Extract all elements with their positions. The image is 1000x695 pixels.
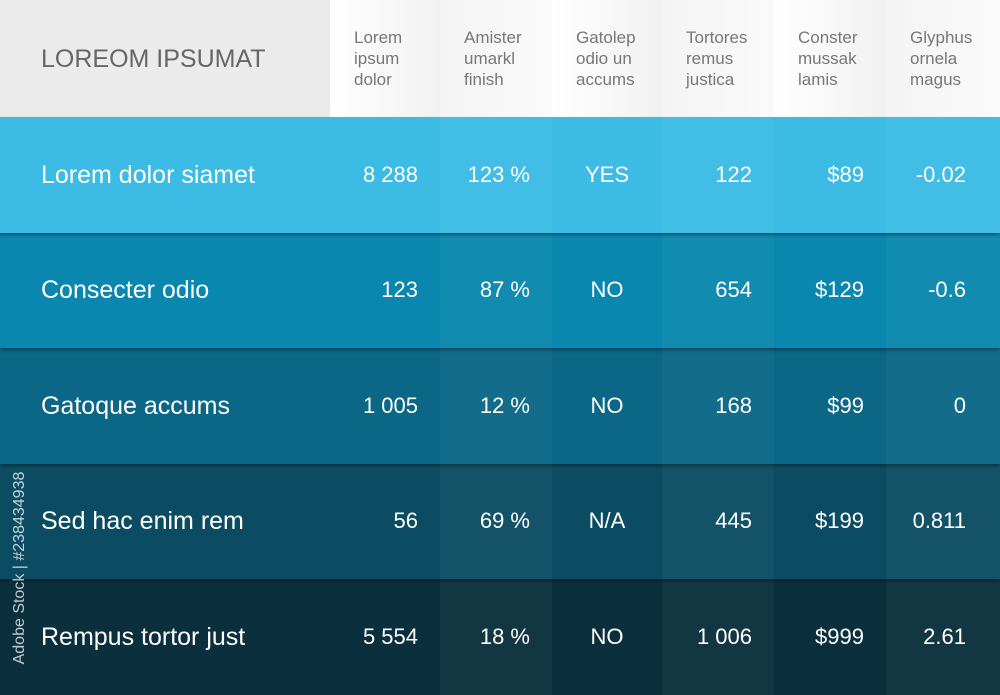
label: Lorem dolor siamet	[41, 161, 255, 189]
label: Consecter odio	[41, 276, 209, 304]
title: LOREOM IPSUMAT	[41, 45, 266, 73]
row 2: 123	[381, 277, 418, 302]
header: col 3: odio un	[576, 49, 632, 68]
row 4: 0.811	[913, 508, 966, 533]
header: col 2	[440, 0, 552, 117]
row 4: N/A	[589, 508, 625, 533]
header: col 1: ipsum	[354, 49, 399, 68]
row 2: 654	[715, 277, 752, 302]
row 2: NO	[590, 277, 624, 302]
row 5: 1 006	[697, 624, 752, 649]
header: col 1: dolor	[354, 70, 392, 89]
row 3: 12 %	[480, 393, 530, 418]
label: Sed hac enim rem	[41, 507, 244, 535]
row 3: $99	[827, 393, 864, 418]
title	[0, 0, 330, 117]
watermark id text: Adobe Stock | #238434938	[11, 472, 28, 664]
row 1: 123 %	[468, 162, 530, 187]
row 1: -0.02	[916, 162, 966, 187]
label: Gatoque accums	[41, 392, 230, 420]
row 3: NO	[590, 393, 624, 418]
row 5: $999	[815, 624, 864, 649]
header: col 4	[662, 0, 774, 117]
header: col 5: mussak	[798, 49, 857, 68]
row 5: 5 554	[363, 624, 418, 649]
row 2: $129	[815, 277, 864, 302]
row 1	[0, 117, 1000, 233]
row 5	[0, 579, 1000, 695]
row 4: $199	[815, 508, 864, 533]
row 3	[0, 348, 1000, 464]
header: col 3	[552, 0, 662, 117]
row 2	[0, 232, 1000, 348]
row 3: 1 005	[363, 393, 418, 418]
header: col 6	[886, 0, 1000, 117]
header: col 4: justica	[686, 70, 734, 89]
row 1: $89	[827, 162, 864, 187]
header: col 1	[330, 0, 440, 117]
row 3: 168	[715, 393, 752, 418]
header: col 3: accums	[576, 70, 635, 89]
header: col 2: umarkl	[464, 49, 515, 68]
header: col 5: Conster	[798, 28, 858, 47]
header: col 5	[774, 0, 886, 117]
row 2: 87 %	[480, 277, 530, 302]
header: col 2: Amister	[464, 28, 522, 47]
row 1: 8 288	[363, 162, 418, 187]
header: col 4: Tortores	[686, 28, 747, 47]
header: col 6: ornela	[910, 49, 957, 68]
header: col 1: Lorem	[354, 28, 402, 47]
row 1: YES	[585, 162, 629, 187]
row 5: 2.61	[923, 624, 966, 649]
row 2: -0.6	[928, 277, 966, 302]
header: col 6: magus	[910, 70, 961, 89]
row 3: 0	[954, 393, 966, 418]
row 1: 122	[715, 162, 752, 187]
row 4	[0, 463, 1000, 579]
header: col 3: Gatolep	[576, 28, 636, 47]
header: col 6: Glyphus	[910, 28, 972, 47]
header: col 4: remus	[686, 49, 733, 68]
label: Rempus tortor just	[41, 623, 245, 651]
header: col 2: finish	[464, 70, 504, 89]
row 5: NO	[590, 624, 624, 649]
header: col 5: lamis	[798, 70, 838, 89]
header row	[0, 0, 1000, 117]
row 4: 445	[715, 508, 752, 533]
row 5: 18 %	[480, 624, 530, 649]
row 4: 69 %	[480, 508, 530, 533]
row 4: 56	[394, 508, 418, 533]
